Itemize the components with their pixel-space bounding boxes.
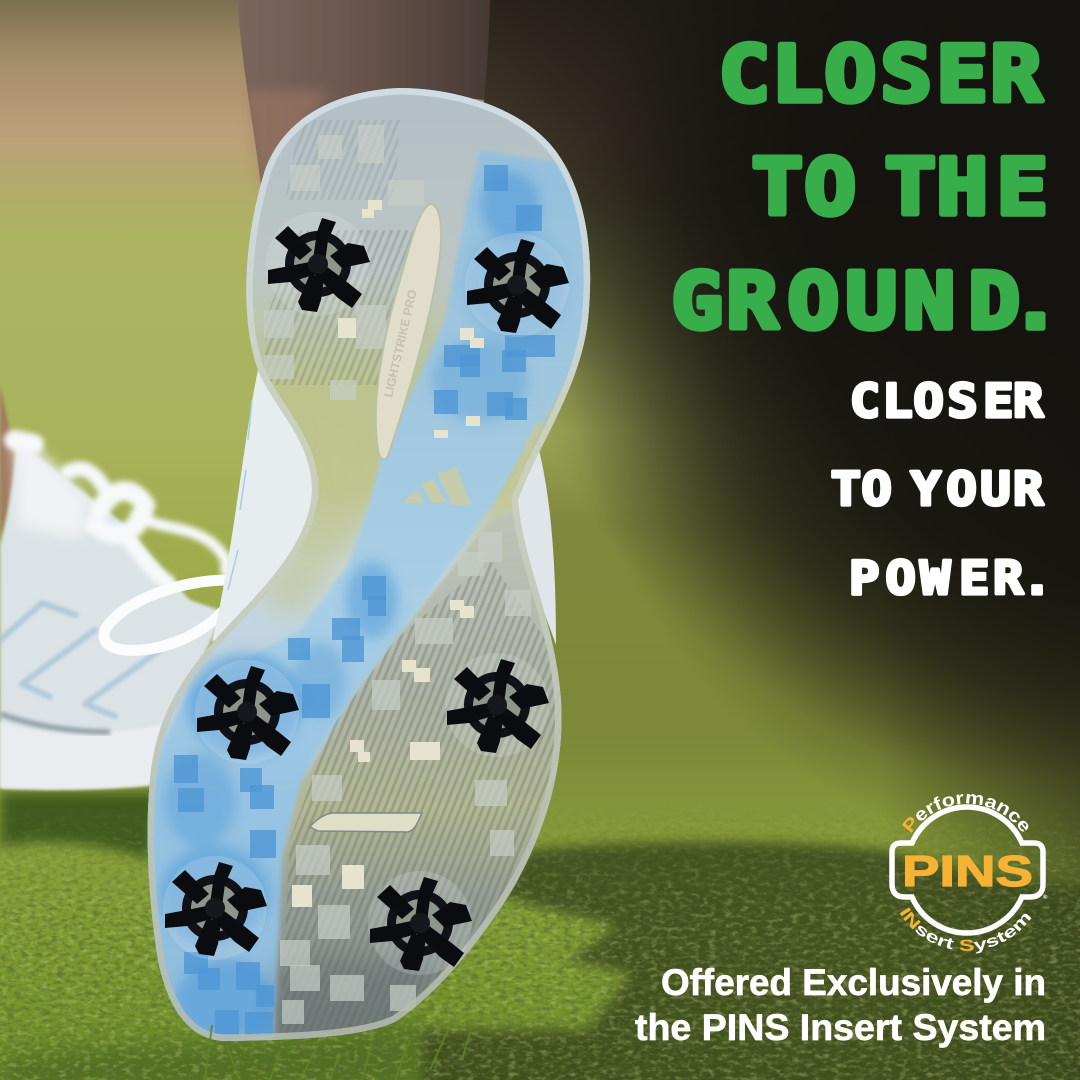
subheading: closer to your power: CLOSER [850, 375, 1044, 428]
subheading: closer to your power: POWER. [849, 552, 1052, 605]
olive stripe beside band [494, 420, 544, 514]
blue pixel blocks [174, 165, 555, 1036]
caption: offered exclusively [635, 962, 1046, 1048]
cleat: mid left [195, 660, 299, 764]
midfoot cream blade with embossed name: LIGHTSTRIKE PRO [381, 288, 420, 399]
heading: closer to the ground: TO THE [752, 143, 1048, 233]
grey pixel blocks [264, 125, 531, 1024]
PINS logo badge: ® [1043, 894, 1048, 901]
rib texture [282, 562, 555, 997]
other foot: white shoe in the background [0, 385, 228, 789]
caption: offered exclusively: Offered Exclusively in [661, 962, 1046, 1003]
foreground grass tufts [205, 1025, 472, 1080]
three-bar logo on sole [405, 467, 471, 505]
PINS logo badge: Performance [902, 794, 1028, 833]
midfoot cream blade with embossed name [376, 204, 441, 459]
PINS logo badge: INsert System [900, 907, 1032, 954]
shoe stripes [0, 603, 160, 716]
cleat: rear left [163, 856, 267, 960]
leg above the shoe [238, 0, 490, 195]
PINS logo badge: PINS [902, 847, 1033, 896]
blurred laces [14, 440, 226, 582]
PINS logo badge [889, 794, 1048, 954]
shoe collar [14, 442, 90, 540]
heading: closer to the ground: GROUND. [671, 257, 1061, 347]
cleat: front right [465, 233, 569, 337]
shoe lace loop [104, 580, 228, 650]
heading: closer to the ground: CLOSER [719, 30, 1043, 120]
heel panel [274, 505, 575, 1045]
cleat: rear right [368, 871, 472, 975]
cleat: front left [266, 212, 370, 316]
golf shoe sole [140, 80, 600, 1050]
saturated blue glow [160, 171, 565, 1040]
midsole [0, 722, 172, 789]
cleat: mid right [445, 653, 549, 757]
cream window blocks [292, 200, 484, 907]
blue midfoot band [140, 150, 600, 1045]
olive waist panel [258, 495, 361, 622]
heading: closer to the ground [671, 30, 1061, 347]
subheading: closer to your power [831, 375, 1052, 605]
heel lower shading [274, 960, 440, 1045]
heel cream slot [310, 813, 422, 832]
subheading: closer to your power: TO YOUR [831, 463, 1044, 516]
clear outer rim [148, 88, 590, 1041]
caption: offered exclusively: the PINS Insert System [635, 1007, 1046, 1048]
white shoe upper visible beside the sole [212, 370, 556, 645]
